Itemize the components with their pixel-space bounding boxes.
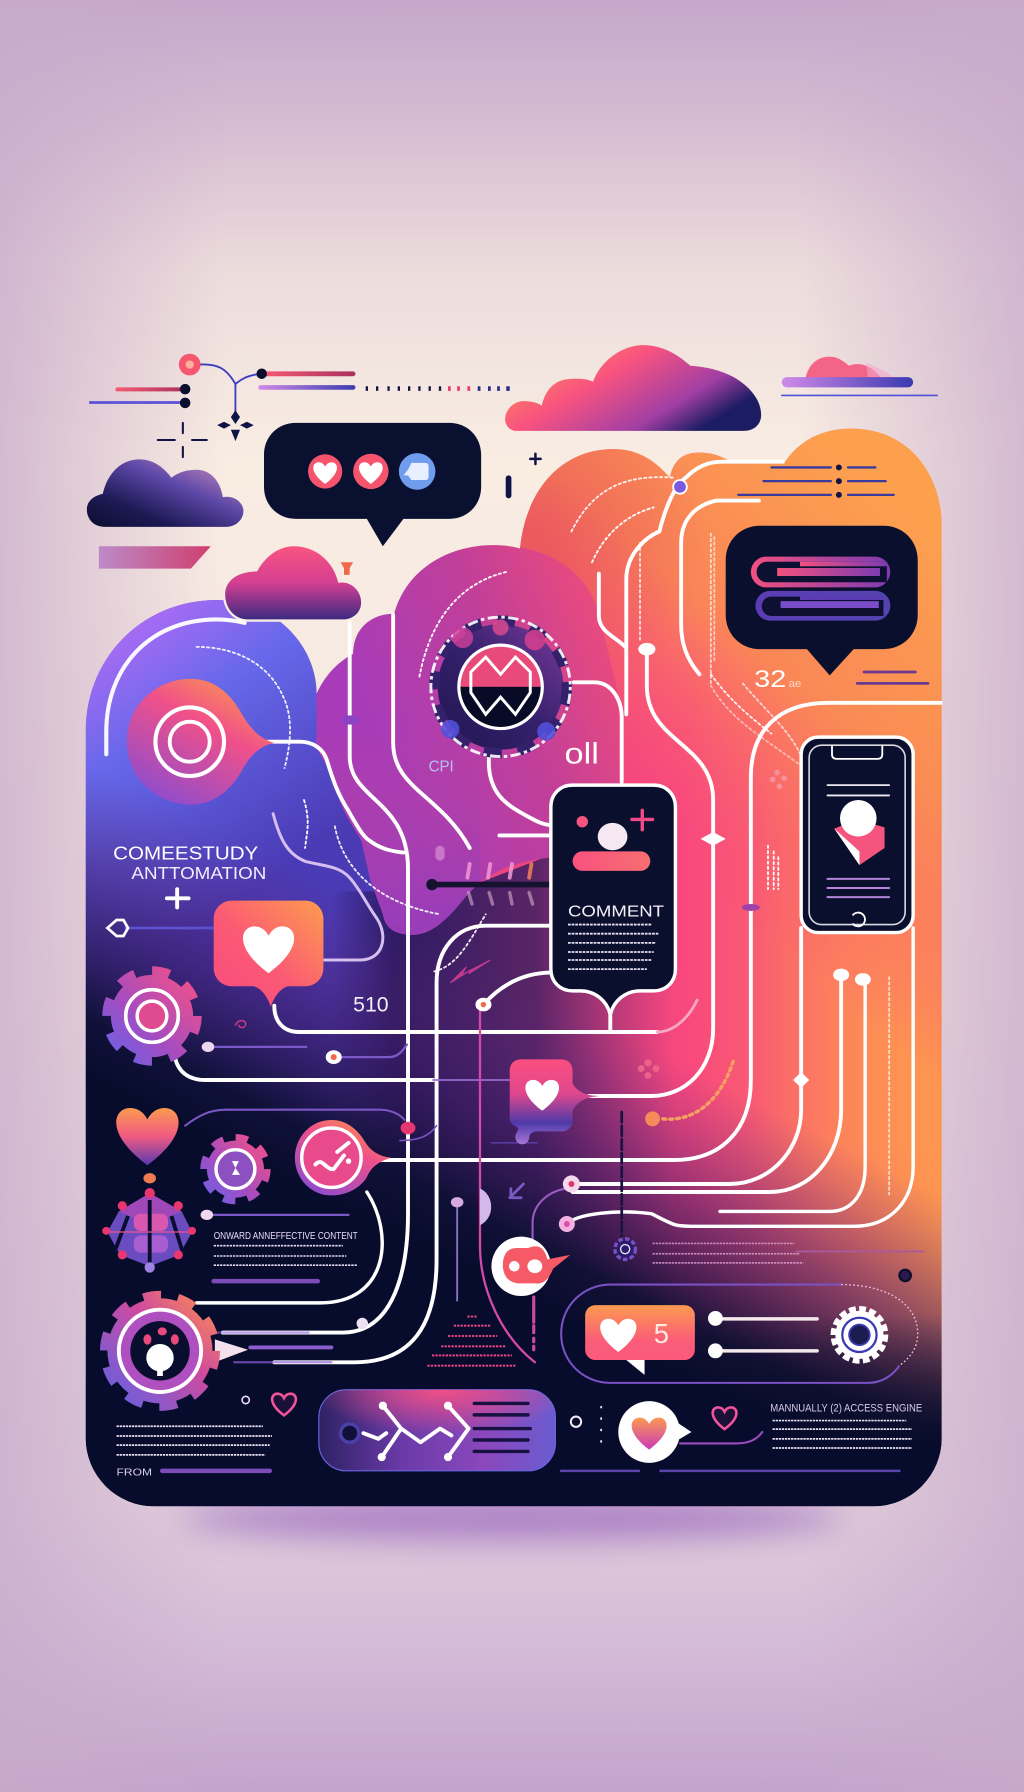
text block: lower right: MANNUALLY (2) ACCESS ENGINE bbox=[770, 1402, 922, 1414]
purple bar bbox=[211, 1279, 320, 1283]
icon: network hexagon bbox=[102, 1188, 196, 1273]
phone top lines bbox=[827, 785, 889, 795]
icon: heart outline right bbox=[713, 1407, 736, 1429]
icon: gradient heart bbox=[116, 1108, 179, 1165]
label: 32: ae bbox=[789, 678, 801, 690]
lobe: magenta centre bbox=[317, 545, 623, 935]
plus bbox=[632, 810, 653, 830]
dome arc line bbox=[106, 619, 245, 754]
text lines: right middle bbox=[653, 1243, 923, 1263]
plum lower area bbox=[338, 858, 666, 1258]
dashed pink line bbox=[532, 1297, 535, 1350]
heading: COMEESTUDY bbox=[113, 842, 258, 863]
heart box bbox=[214, 901, 323, 1007]
side lines under bubble bbox=[857, 672, 928, 683]
small pink flower bbox=[770, 770, 787, 789]
avatar bbox=[598, 823, 627, 850]
phone bottom lines bbox=[827, 879, 889, 897]
bottom dots bbox=[600, 1407, 602, 1442]
beaded arc bbox=[645, 1059, 734, 1126]
dotted arcs bbox=[197, 477, 889, 1194]
icon: gauge badge bbox=[295, 1120, 391, 1195]
icon: heart outline bbox=[272, 1394, 296, 1415]
small orange mark bbox=[341, 562, 353, 575]
caption: FROM bbox=[117, 1467, 152, 1478]
gear white bbox=[833, 1309, 886, 1361]
phone bbox=[801, 737, 913, 933]
text block: onward: ONWARD ANNEFFECTIVE CONTENT bbox=[214, 1231, 358, 1242]
heading bbox=[113, 842, 266, 883]
icon: gear purple bbox=[107, 971, 197, 1061]
pill top bbox=[751, 557, 890, 587]
bar bbox=[160, 1469, 272, 1473]
dotted tick block bbox=[768, 846, 778, 889]
cloud: small right bbox=[782, 357, 937, 395]
comment title: COMMENT bbox=[568, 904, 664, 921]
decorative connector cluster bbox=[89, 354, 355, 441]
icon: central gear bbox=[431, 617, 570, 757]
icon: diamond node bbox=[107, 920, 128, 936]
vertical tick bbox=[506, 475, 511, 498]
small ring bbox=[242, 1396, 249, 1404]
speech bubble: reactions bbox=[264, 423, 481, 546]
icon: heart reaction 2 bbox=[353, 454, 389, 489]
comment lines bbox=[568, 925, 658, 969]
chart polyline bbox=[363, 1406, 469, 1457]
icon: heart reaction 1 bbox=[308, 454, 342, 489]
panel shadow bbox=[181, 1495, 843, 1541]
line chart pill bbox=[319, 1390, 555, 1471]
pill bottom bbox=[755, 591, 890, 621]
label: 510: 510 bbox=[353, 991, 389, 1016]
text block: lower left bbox=[117, 1426, 272, 1478]
plus mark bbox=[530, 454, 541, 464]
dotted row bbox=[366, 386, 510, 391]
body lines bbox=[214, 1246, 358, 1265]
small dark gear bbox=[615, 1239, 635, 1259]
cloud: orange bbox=[505, 345, 761, 431]
main panel bbox=[80, 423, 949, 1520]
label: oll: oll bbox=[565, 737, 599, 770]
dotted pyramid bbox=[427, 1317, 515, 1366]
ribs on black bar bbox=[435, 846, 533, 904]
capsule panel bbox=[561, 1285, 918, 1383]
triple line legend bbox=[738, 464, 894, 498]
chat bot badge bbox=[491, 1237, 570, 1296]
bottom ring bbox=[571, 1417, 581, 1427]
squiggle marks bbox=[235, 960, 490, 1028]
heading: ANTTOMATION bbox=[131, 863, 266, 883]
label: 32 bbox=[754, 666, 801, 693]
body lines bbox=[773, 1421, 912, 1448]
icon: thumbs reaction bbox=[399, 453, 435, 490]
speech bubble: message pills bbox=[726, 526, 918, 675]
text block: lower right bbox=[770, 1402, 922, 1448]
icon: small gear bbox=[204, 1138, 267, 1201]
label: 32: 32 bbox=[754, 666, 786, 693]
icon: big gear bbox=[105, 1296, 248, 1406]
text block: onward bbox=[211, 1231, 358, 1283]
cloud: pink bbox=[225, 546, 361, 619]
orange like box bbox=[585, 1305, 695, 1375]
small orange dot bbox=[143, 1173, 156, 1183]
connector lines bbox=[126, 462, 941, 1443]
avatar dot bbox=[577, 816, 588, 827]
small arrow mark bbox=[510, 1184, 523, 1198]
plus glyph bbox=[167, 889, 189, 907]
lobe: blue dome bbox=[80, 594, 398, 1143]
heart box small bbox=[510, 1059, 600, 1144]
cloud: navy bbox=[87, 459, 243, 527]
comment card bbox=[551, 785, 675, 1032]
node knobs bbox=[201, 480, 871, 1329]
slider rows bbox=[715, 1319, 817, 1351]
icon: target bulb bbox=[127, 679, 274, 805]
small ring dark bbox=[899, 1270, 911, 1281]
chart legend lines bbox=[474, 1403, 530, 1451]
phone heart icon bbox=[834, 800, 885, 865]
dark gradient floor bbox=[80, 731, 949, 1520]
bottom rules bbox=[561, 1470, 899, 1472]
crosshair mark bbox=[158, 423, 207, 457]
avatar pill bbox=[573, 851, 650, 871]
chart ring bbox=[341, 1424, 359, 1442]
label: CPI: CPI bbox=[429, 758, 454, 775]
pink flower mark bbox=[638, 1059, 659, 1079]
parallelogram banner bbox=[99, 546, 211, 569]
orange like box: 5 bbox=[654, 1318, 669, 1349]
heart speech badge bbox=[618, 1401, 691, 1463]
